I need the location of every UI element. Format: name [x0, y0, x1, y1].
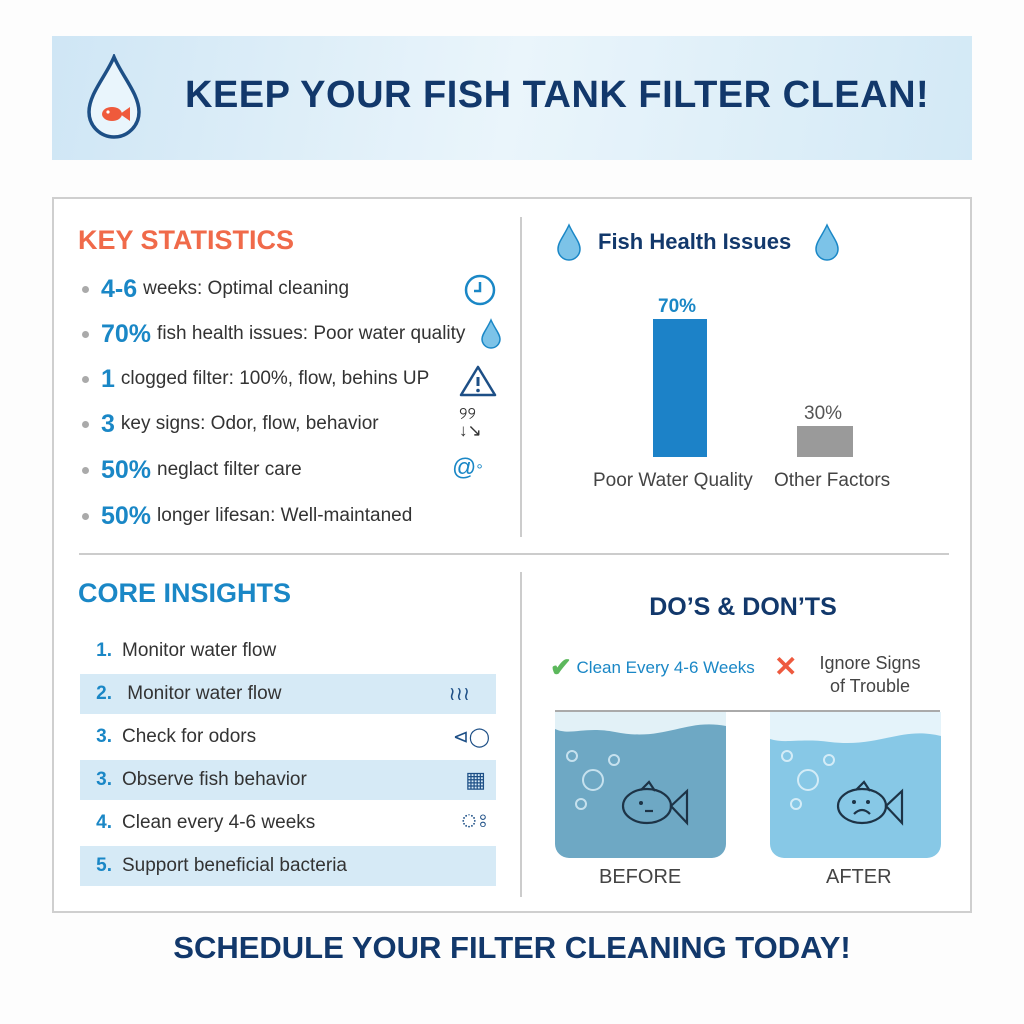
- icon: water drop with fish: [87, 54, 141, 139]
- insight rows: ঃ: [460, 811, 488, 832]
- stat rows: [82, 274, 466, 530]
- tank: before: [555, 712, 726, 858]
- insight rows: 4.: [96, 812, 112, 833]
- tank: after: [770, 712, 941, 858]
- insight rows: ≀≀≀: [449, 684, 470, 704]
- header banner: [52, 36, 972, 160]
- insight rows: 2.: [96, 683, 112, 704]
- icon: signs: [459, 404, 482, 440]
- insight rows: Monitor water flow: [122, 640, 276, 661]
- insight rows: 3.: [96, 726, 112, 747]
- stat rows: fish health issues: Poor water quality: [157, 323, 465, 344]
- insight rows: Monitor water flow: [127, 683, 281, 704]
- heading: key statistics: KEY STATISTICS: [78, 225, 294, 255]
- stat rows: key signs: Odor, flow, behavior: [121, 413, 379, 434]
- chart heading: Fish Health Issues: [598, 229, 791, 254]
- bar: poor water quality: [653, 319, 707, 457]
- chart: fish health issues: Other Factors: [774, 470, 890, 491]
- stat rows: 70%: [101, 320, 151, 348]
- insight rows: Observe fish behavior: [122, 769, 307, 790]
- stat rows: 1: [101, 364, 115, 392]
- do item: ✔ Clean Every 4-6 Weeks: [550, 652, 755, 682]
- stat rows: longer lifesan: Well-maintaned: [157, 505, 412, 526]
- chart: fish health issues: 30%: [804, 403, 842, 424]
- icon: swirl fish: @°: [452, 454, 483, 481]
- stat rows: 3: [101, 410, 115, 438]
- stat rows: weeks: Optimal cleaning: [143, 278, 349, 299]
- stat rows: 50%: [101, 456, 151, 484]
- insight rows: [80, 640, 496, 886]
- heading: core insights: CORE INSIGHTS: [78, 578, 291, 608]
- heading: dos and donts: DO’S & DON’TS: [649, 593, 837, 621]
- icon: drop: [481, 318, 501, 349]
- stat rows: clogged filter: 100%, flow, behins UP: [121, 368, 429, 389]
- chart: fish health issues: [557, 223, 890, 491]
- panel: do's and don'ts: BEFORE: [599, 866, 681, 888]
- panel: do's and don'ts: AFTER: [826, 866, 892, 888]
- insight rows: Support beneficial bacteria: [122, 855, 347, 876]
- insight rows: ⊲◯: [453, 726, 490, 748]
- icon: signs: ↓↘: [459, 421, 482, 440]
- insight rows: 3.: [96, 769, 112, 790]
- insight rows: ▦: [465, 767, 486, 792]
- insight rows: Check for odors: [122, 726, 256, 747]
- main panel: [52, 197, 972, 913]
- footer call to action: SCHEDULE YOUR FILTER CLEANING TODAY!: [173, 930, 851, 965]
- insight rows: 5.: [96, 855, 112, 876]
- stat rows: 50%: [101, 502, 151, 530]
- stat rows: 4-6: [101, 274, 137, 302]
- panel: do's and don'ts: [550, 593, 941, 888]
- bar: other factors: [797, 426, 853, 457]
- panel: do's and don'ts: Ignore Signs of Trouble: [819, 653, 921, 696]
- dont item: ✕: [774, 651, 797, 682]
- insight rows: Clean every 4-6 weeks: [122, 812, 315, 833]
- stat rows: neglact filter care: [157, 459, 302, 480]
- chart: fish health issues: Poor Water Quality: [593, 470, 753, 491]
- icon: clock: [464, 274, 496, 306]
- chart: fish health issues: 70%: [658, 296, 696, 317]
- insight rows: 1.: [96, 640, 112, 661]
- icon: warning: [460, 366, 496, 396]
- title: KEEP YOUR FISH TANK FILTER CLEAN!: [185, 74, 929, 116]
- icon: signs: ୨୨: [459, 404, 476, 423]
